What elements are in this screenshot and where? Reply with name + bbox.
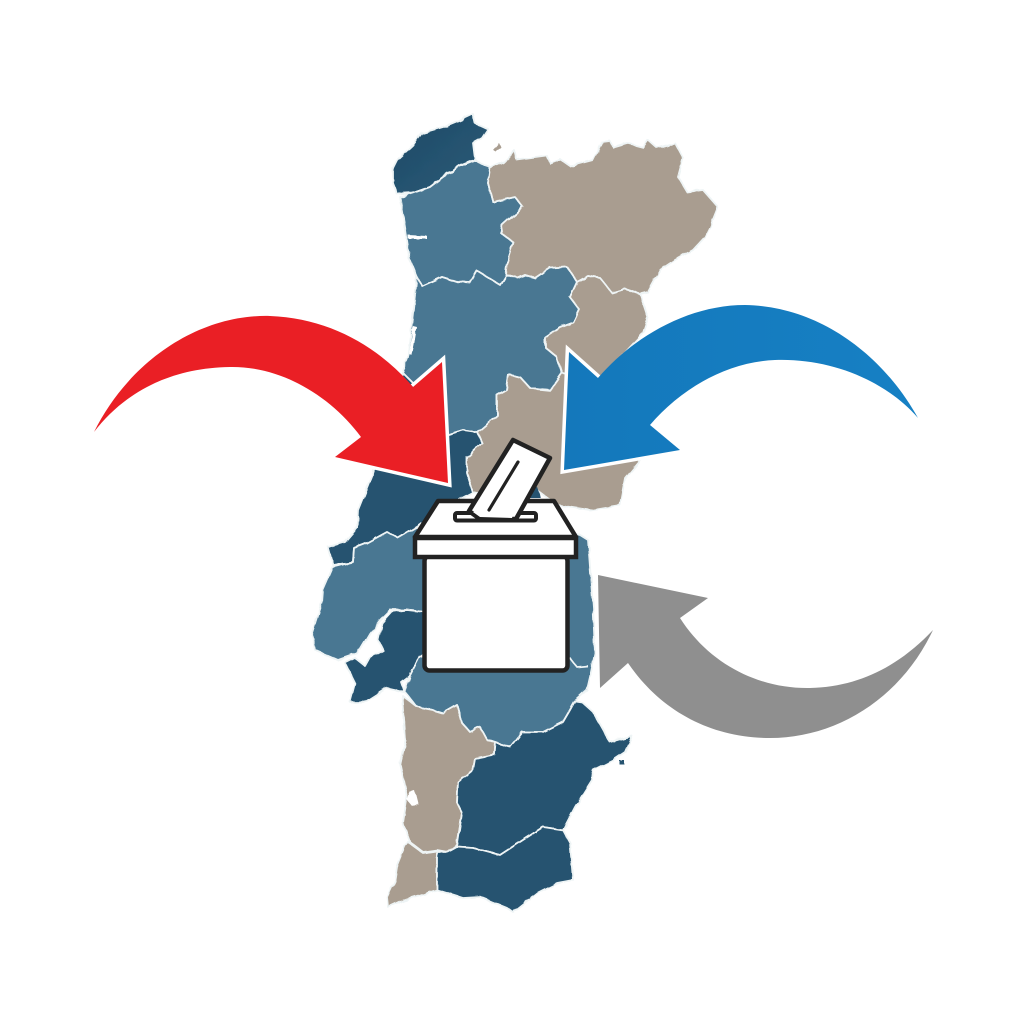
- region: Algarve, dark blue: [437, 827, 573, 912]
- region: Alentejo south, dark blue: [457, 701, 632, 855]
- ballot box lid: [415, 501, 576, 537]
- region: central interior, beige: [467, 373, 640, 510]
- region: north east, beige: [488, 140, 718, 294]
- region: south west, beige: [400, 695, 496, 852]
- icon: ballot box: [415, 440, 576, 670]
- region: Lisbon west, mid blue: [312, 527, 430, 660]
- ballot box body: [424, 556, 568, 670]
- region: west coast, dark blue: [328, 372, 482, 565]
- arrow: gray: [598, 575, 933, 738]
- region: Setubal, dark blue: [345, 610, 430, 702]
- arrow: blue: [564, 305, 918, 470]
- region: south west corner, beige: [387, 842, 437, 907]
- region: north coast, mid blue: [400, 160, 523, 286]
- arrow: red: [94, 316, 448, 483]
- region: Alentejo north, mid blue: [405, 530, 595, 747]
- region: centre north, mid blue: [402, 267, 579, 435]
- ballot paper: [469, 440, 550, 519]
- ballot slot: [455, 513, 536, 520]
- region: islands and lagoons: [407, 143, 624, 806]
- region: inner centre, beige: [545, 276, 648, 380]
- map of Portugal: [312, 114, 718, 912]
- region: far north, dark blue: [393, 114, 488, 194]
